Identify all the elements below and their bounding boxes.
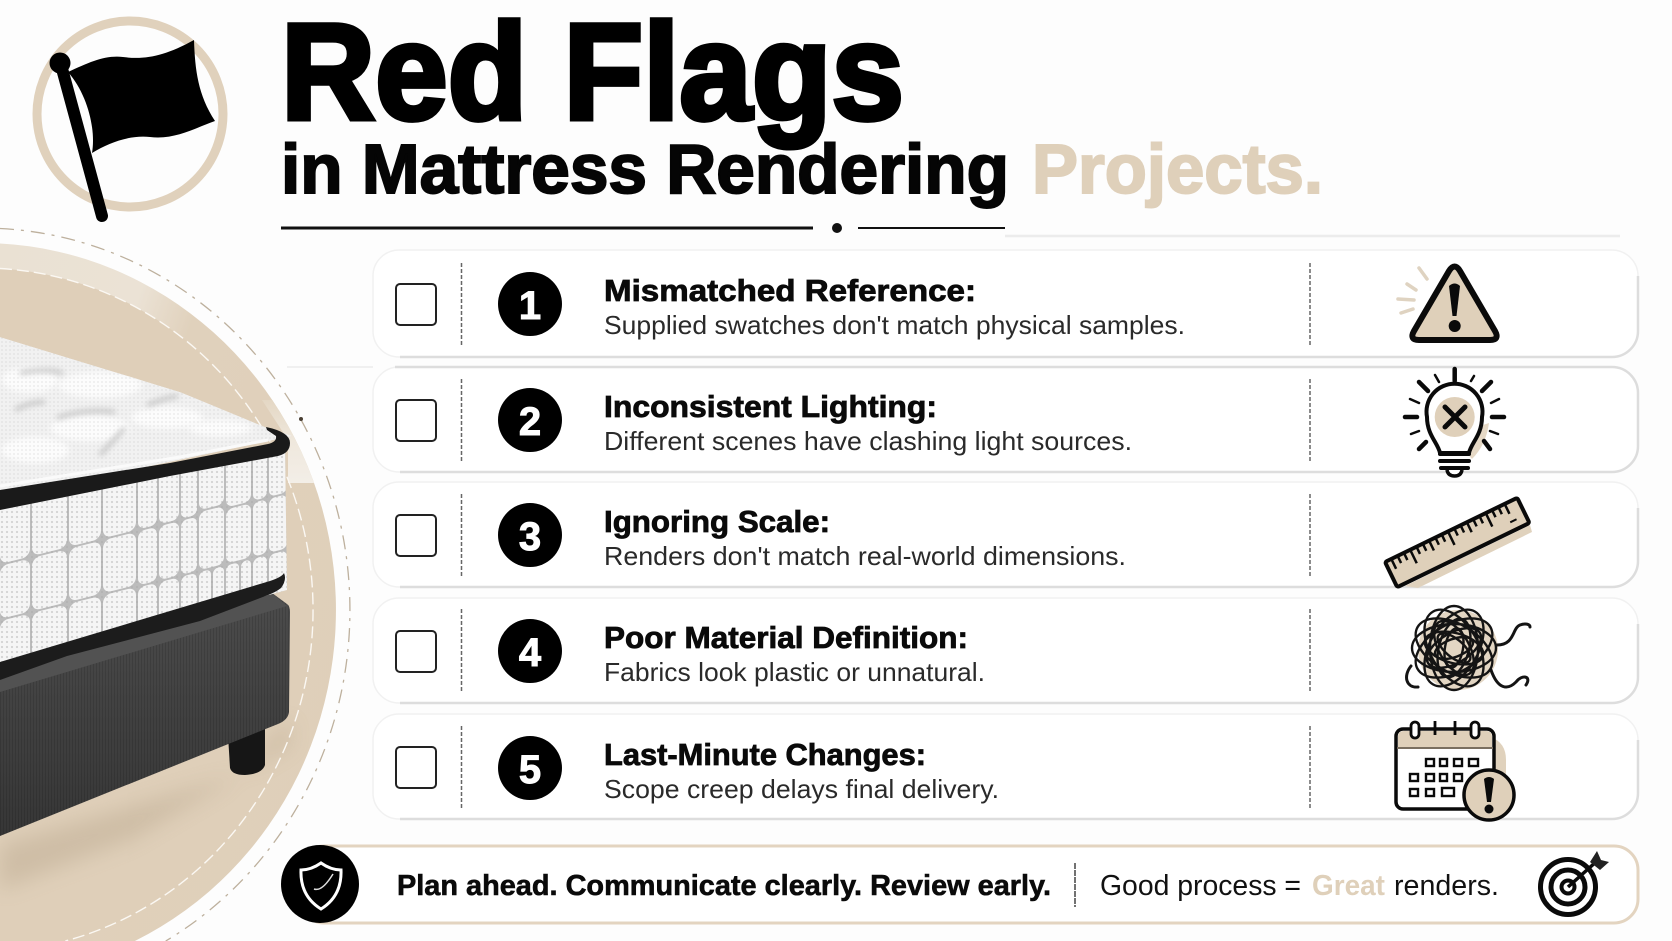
item 3 text: Renders don't match real-world dimensions. <box>604 541 1126 571</box>
mattress foot <box>228 728 265 775</box>
item 2 text: Inconsistent Lighting: <box>604 389 937 424</box>
number badge 5 <box>498 736 562 800</box>
panel: mattress photo in tan circle <box>0 228 350 941</box>
number badge 1: 1 <box>519 284 541 328</box>
panel: row 5 last-minute changes <box>373 714 1638 820</box>
icon: black flag in tan ring <box>37 21 223 216</box>
item 5 text <box>604 737 999 804</box>
title: Projects. <box>1032 130 1323 208</box>
mattress quilted side panel <box>0 453 287 662</box>
item 4 text: Poor Material Definition: <box>604 620 968 655</box>
checkbox 2 <box>396 400 436 441</box>
item 5 text: Scope creep delays final delivery. <box>604 774 999 804</box>
number badge 4 <box>498 619 562 683</box>
number badge 2: 2 <box>519 400 541 444</box>
icon: calendar with alert <box>1396 721 1514 820</box>
banner equation text: Good process = <box>1100 870 1301 902</box>
line extending from row 2 <box>287 366 373 368</box>
item 1 text <box>604 273 1185 340</box>
title: Red Flags <box>281 0 904 149</box>
number badge 3 <box>498 503 562 567</box>
mattress base <box>0 590 290 836</box>
checkbox 4 <box>396 631 436 672</box>
title rule <box>281 223 1620 236</box>
number badge 4: 4 <box>519 631 542 675</box>
number badge 3: 3 <box>519 515 541 559</box>
icon: shield badge <box>281 845 359 923</box>
item 4 text <box>604 620 985 687</box>
icon: target with arrow <box>1540 851 1609 914</box>
icon: ruler <box>1385 498 1532 588</box>
panel: row 1 mismatched reference <box>373 250 1638 357</box>
number badge 1 <box>498 272 562 336</box>
title: in Mattress Rendering <box>281 130 1009 208</box>
banner equation text: Great <box>1312 870 1385 902</box>
checkbox 3 <box>396 515 436 556</box>
banner equation text: renders. <box>1394 870 1499 902</box>
title <box>281 0 1323 208</box>
panel: row 2 inconsistent lighting <box>373 367 1638 476</box>
mattress lower piping <box>0 573 285 680</box>
item 3 text <box>604 504 1126 571</box>
banner equation text <box>1100 870 1499 902</box>
number badge 2 <box>498 388 562 452</box>
item 1 text: Supplied swatches don't match physical samples. <box>604 310 1185 340</box>
mattress upper piping <box>0 427 290 510</box>
mattress top surface <box>0 337 291 490</box>
panel: row 3 ignoring scale <box>373 482 1638 588</box>
banner bold message: Plan ahead. Communicate clearly. Review early. <box>397 870 1051 902</box>
panel: row 4 poor material definition <box>373 598 1638 703</box>
item 3 text: Ignoring Scale: <box>604 504 830 539</box>
checkbox 1 <box>396 284 436 325</box>
item 2 text <box>604 389 1132 456</box>
item 4 text: Fabrics look plastic or unnatural. <box>604 657 985 687</box>
item 1 text: Mismatched Reference: <box>604 273 976 308</box>
icon: warning triangle <box>1398 266 1497 340</box>
item 2 text: Different scenes have clashing light sources. <box>604 426 1132 456</box>
icon: tangled yarn ball <box>1406 600 1530 696</box>
number badge 5: 5 <box>519 748 541 792</box>
item 5 text: Last-Minute Changes: <box>604 737 926 772</box>
icon: light bulb with x <box>1405 369 1504 476</box>
panel: bottom takeaway banner <box>281 845 1638 923</box>
checkbox 5 <box>396 747 436 788</box>
